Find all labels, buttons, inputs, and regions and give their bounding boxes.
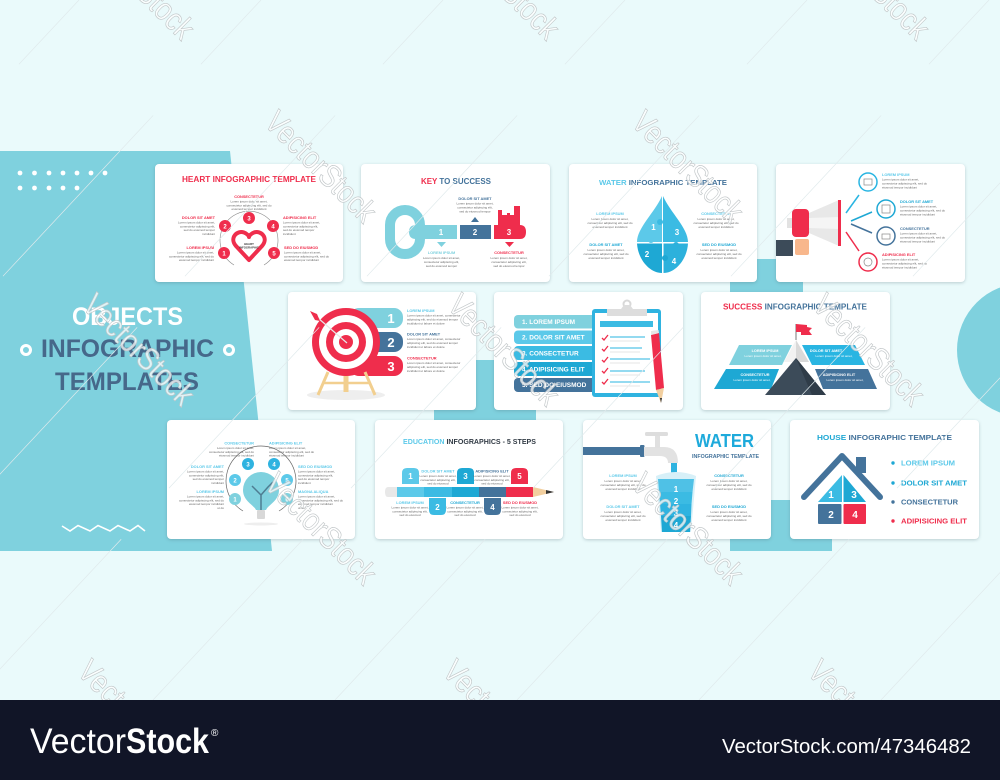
bar text: 1. LOREM IPSUM (522, 319, 575, 326)
labels: consectetur adipiscing elit, (420, 478, 456, 482)
labels (733, 349, 864, 382)
heart caption: INFOGRAPHIC (239, 246, 259, 250)
labels: Lorem ipsum dolor sit amet, (473, 474, 511, 478)
heart caption: HEART (244, 242, 254, 246)
labels: eiusmod tempor incididunt (711, 487, 747, 491)
panel: key to success: 3 (507, 228, 512, 237)
bulb icon (243, 472, 279, 526)
labels: Lorem ipsum dolor sit amet, (882, 258, 919, 262)
labels: MAGNA ALIQUA (298, 489, 329, 494)
numbered circles (229, 458, 293, 505)
labels: sed do eiusmod (454, 513, 476, 517)
labels: eiusmod tempor incididunt (698, 225, 734, 229)
title: HOUSE INFOGRAPHIC TEMPLATE (817, 433, 952, 442)
labels: consectetur adipiscing elit, sed do (900, 236, 945, 240)
labels: Lorem ipsum dolor sit amet, (900, 232, 937, 236)
labels (423, 196, 528, 268)
labels: Lorem ipsum dolor sit amet, consectetur (407, 314, 460, 318)
labels: incididunt (283, 232, 296, 236)
glass numbers: 2 (674, 497, 679, 506)
step tabs (402, 468, 528, 515)
numbers: 5 (272, 252, 276, 258)
bullet list (891, 458, 967, 526)
tab numbers (408, 472, 522, 512)
panel: heart infographic (155, 164, 343, 282)
labels: DOLOR SIT AMET (810, 349, 843, 353)
key icon (390, 206, 526, 254)
numbers: 4 (272, 462, 276, 468)
labels: consectetur adipiscing elit, sed do (284, 254, 329, 258)
numbered circles (218, 212, 280, 259)
labels: consectetur adipiscing elit, sed do (169, 254, 214, 258)
labels: ADIPISICING ELIT (283, 215, 317, 220)
title: WATER (695, 431, 754, 451)
labels: eiusmod tempor incididunt (284, 258, 319, 262)
labels: Lorem ipsum dolor sit amet, (697, 217, 735, 221)
labels: Lorem ipsum dolor sit amet, (269, 446, 306, 450)
labels: DOLOR SIT AMET (182, 215, 216, 220)
clipboard icon (592, 300, 661, 397)
band numbers: 1 (387, 311, 395, 326)
labels: ut do (217, 506, 224, 510)
labels: SED DO EIUSMOD (702, 242, 736, 247)
bullet list: CONSECTETUR (901, 498, 959, 506)
labels: consectetur adipiscing elit, sed do (600, 483, 646, 487)
labels: consectetur adipiscing elit, sed do (706, 483, 752, 487)
watermark text: VectorStock (441, 286, 568, 413)
drop icon (637, 196, 688, 273)
labels: Lorem ipsum dolor sit amet, (217, 446, 254, 450)
numbers: 2 (223, 224, 227, 230)
panel: main heading (18, 171, 233, 531)
labels: Lorem ipsum dolor sit amet, (490, 256, 528, 260)
labels: DOLOR SIT AMET (421, 468, 455, 474)
bar text: 5. SED DO EIUSMOD (522, 382, 587, 389)
list bars (514, 315, 596, 392)
tab numbers: 4 (490, 503, 495, 512)
labels: consectetur adipiscing elit, (447, 509, 483, 513)
panel: key to success: 2 (473, 228, 478, 237)
labels: sed do eiusmod tempor (283, 228, 314, 232)
pencil icon (651, 330, 664, 403)
labels: CONSECTETUR (234, 194, 264, 199)
labels: CONSECTETUR (701, 211, 731, 216)
labels: SED DO EIUSMOD (712, 504, 746, 509)
bar text: 2. DOLOR SIT AMET (522, 334, 585, 342)
tab numbers: 1 (408, 472, 413, 481)
labels: adipiscing elit, sed do eiusmod tempor (407, 318, 458, 322)
labels: CONSECTETUR (900, 226, 930, 231)
labels: sed do eiusmod tempor (426, 264, 457, 268)
house numbers: 4 (852, 510, 858, 521)
labels: LOREM IPSUM (187, 245, 214, 250)
labels: consectetur adipiscing elit, sed do (298, 498, 343, 502)
labels: Lorem ipsum dolor sit amet, (591, 217, 629, 221)
labels: consectetur adipiscing elit, sed do (882, 182, 927, 186)
labels: DOLOR SIT AMET (191, 464, 225, 469)
step bands (350, 308, 403, 376)
heading: objects: OBJECTS (72, 303, 183, 331)
labels: CONSECTETUR (741, 373, 770, 377)
labels: consectetur adipiscing elit, (502, 509, 538, 513)
labels: eiusmod tempor incididunt (179, 258, 214, 262)
labels: consectetur adipiscing elit, (491, 260, 527, 264)
labels: Lorem ipsum dolor sit amet, (744, 354, 782, 358)
labels: consectetur adipiscing elit, sed do (693, 221, 739, 225)
panel: water glass (583, 420, 771, 539)
panel: water drop: 3 (675, 228, 680, 237)
glass numbers: 1 (674, 485, 679, 494)
glass numbers: 3 (674, 509, 679, 518)
tab numbers: 5 (517, 472, 522, 481)
labels: CONSECTETUR (224, 440, 254, 446)
numbers (233, 462, 289, 504)
numbers: 4 (271, 224, 275, 230)
labels: LOREM IPSUM (609, 473, 637, 478)
title: WATER INFOGRAPHIC TEMPLATE (599, 178, 727, 187)
teal decorative shapes (434, 259, 1000, 551)
labels: eiusmod tempor incididunt (882, 186, 917, 190)
footer reference id: VectorStock.com/47346482 (722, 736, 971, 758)
megaphone icon (776, 200, 841, 256)
pointer triangles (437, 217, 514, 247)
footer logo: Vector (30, 722, 126, 761)
labels: eiusmod tempor incididunt (882, 266, 917, 270)
labels: LOREM IPSUM (882, 172, 909, 177)
labels: LOREM IPSUM (596, 211, 624, 216)
numbers (222, 216, 276, 258)
heart icon (233, 232, 265, 260)
labels: Lorem ipsum dolor sit amet, (284, 250, 321, 254)
title: KEY TO SUCCESS (421, 177, 492, 186)
labels: Lorem ipsum dolor sit amet, (604, 479, 642, 483)
labels: sed do eiusmod (481, 482, 503, 486)
panel: water drop (569, 164, 757, 282)
teal left panel (0, 151, 272, 551)
labels: sed do eiusmod (427, 482, 449, 486)
labels: eiusmod tempor incididunt (701, 256, 737, 260)
labels: consectetur adipiscing elit, sed do (882, 262, 927, 266)
labels: consectetur adipiscing elit, sed do (226, 203, 272, 207)
heading: infographic: INFOGRAPHIC (41, 335, 214, 363)
panel: water drop: 2 (645, 250, 650, 259)
labels: consectetur adipiscing elit, sed do (583, 252, 629, 256)
labels: ADIPISICING ELIT (882, 252, 916, 257)
dot grid (18, 171, 107, 190)
glass numbers: 4 (674, 521, 679, 530)
labels: Lorem ipsum dolor sit amet, (882, 178, 919, 182)
panel: education pencil (375, 420, 563, 539)
labels: consectetur adipiscing elit, sed do (587, 221, 633, 225)
labels: eiusmod tempor incididunt (900, 240, 935, 244)
labels: Lorem ipsum dolor sit amet, (604, 510, 642, 514)
tap icon (583, 432, 678, 463)
trapezoids (714, 345, 877, 389)
labels: ut do (298, 506, 305, 510)
house numbers: 2 (828, 510, 834, 521)
labels: sed do eiusmod (509, 513, 531, 517)
labels: DOLOR SIT AMET (606, 504, 640, 509)
labels: consectetur adipiscing elit, (189, 473, 224, 477)
footer bar (0, 700, 1000, 780)
labels: eiusmod tempor incididunt (605, 487, 641, 491)
labels: Lorem ipsum dolor sit amet, (419, 474, 457, 478)
bar text: 3. CONSECTETUR (522, 350, 579, 358)
labels: consectetur adipiscing elit, sed do (696, 252, 742, 256)
bar text: 4. ADIPISICING ELIT (522, 366, 585, 374)
rays (846, 195, 872, 251)
ring ornaments (22, 346, 234, 354)
watermark text: VectorStock (258, 465, 385, 592)
labels: consectetur adipiscing elit, (474, 478, 510, 482)
labels: DOLOR SIT AMET (458, 196, 492, 201)
house numbers: 3 (851, 490, 857, 501)
labels (600, 473, 752, 522)
labels: LOREM IPSUM (752, 349, 778, 353)
labels: incididunt (202, 232, 215, 236)
labels: LOREM IPSUM (396, 500, 424, 505)
labels (169, 194, 329, 262)
labels: adipiscing elit, sed do eiusmod tempor (407, 341, 458, 345)
labels: Lorem ipsum dolor sit amet, (710, 479, 748, 483)
labels: Lorem ipsum dolor sit amet, (815, 354, 853, 358)
labels: Lorem ipsum dolor sit amet, (446, 506, 484, 510)
labels: DOLOR SIT AMET (900, 199, 934, 204)
footer logo bold part: Stock (126, 722, 209, 761)
tab numbers: 2 (435, 503, 440, 512)
labels: Lorem ipsum dolor sit amet, (187, 470, 224, 474)
labels: consectetur adipiscing elit, sed do (179, 498, 224, 502)
labels: eiusmod tempor incididunt (900, 212, 935, 216)
title: EDUCATION INFOGRAPHICS - 5 STEPS (403, 437, 536, 446)
ring icons (859, 173, 895, 271)
labels: eiusmod tempor incididunt (588, 256, 624, 260)
numbers: 1 (222, 252, 226, 258)
numbers: 2 (233, 478, 237, 484)
labels: Lorem ipsum dolor sit amet, (187, 494, 224, 498)
bar text (522, 319, 587, 389)
bullet list: DOLOR SIT AMET (901, 478, 967, 488)
watermark text: VectorStock (258, 103, 385, 230)
labels: consectetur adipiscing elit, (392, 509, 428, 513)
labels: consectetur adipiscing elit, sed do (269, 450, 314, 454)
labels: sed do eiusmod tempor (459, 210, 491, 214)
labels: incididunt ut labore et dolore (407, 369, 445, 373)
labels: incididunt ut labore et dolore (407, 345, 445, 349)
labels: Lorem ipsum dolor sit amet, (700, 248, 738, 252)
labels: consectetur adipiscing elit, (298, 473, 333, 477)
labels: eiusmod tempor incididunt (298, 502, 333, 506)
labels: incididunt (211, 481, 224, 485)
labels: sed do eiusmod tempor (184, 228, 215, 232)
numbers: 1 (233, 498, 237, 504)
glass icon (656, 463, 696, 532)
labels (583, 211, 742, 260)
panel: megaphone (776, 164, 965, 282)
target icon (310, 308, 380, 376)
wave ornament (62, 526, 145, 531)
labels: Lorem ipsum dolor sit amet, (423, 256, 460, 260)
labels: CONSECTETUR (407, 356, 437, 360)
labels: consectetur adipiscing elit, (180, 224, 215, 228)
labels: eiusmod tempor incididunt (231, 207, 267, 211)
panel: light bulb (167, 420, 355, 539)
tab numbers: 3 (463, 472, 468, 481)
labels: SED DO EIUSMOD (503, 500, 537, 505)
labels: LOREM IPSUM (197, 489, 224, 494)
bullet list: LOREM IPSUM (901, 458, 955, 468)
labels (179, 440, 343, 510)
title: SUCCESS INFOGRAPHIC TEMPLATE (723, 302, 868, 312)
labels: sed do eiusmod tempor (298, 477, 329, 481)
house numbers (828, 490, 858, 521)
panel: water drop: 4 (672, 257, 677, 266)
panel: key to success (361, 164, 550, 282)
band numbers (387, 311, 395, 374)
labels: Lorem ipsum dolor sit amet, (733, 378, 771, 382)
labels: Lorem ipsum dolor sit amet, (283, 220, 320, 224)
labels: DOLOR SIT AMET (589, 242, 623, 247)
labels: consectetur adipiscing elit, (283, 224, 318, 228)
labels: sed do eiusmod tempor (493, 264, 525, 268)
labels: Lorem ipsum dolor sit amet, (298, 470, 335, 474)
labels (391, 468, 539, 517)
labels: incididunt ut labore et dolore (407, 322, 445, 326)
panel: clipboard (494, 292, 683, 410)
band numbers: 3 (387, 359, 395, 374)
labels: eiusmod tempor incididunt (592, 225, 628, 229)
labels: consectetur adipiscing elit, sed do (900, 208, 945, 212)
labels: ADIPISICING ELIT (475, 468, 509, 474)
numbers: 3 (246, 462, 250, 468)
watermark text: VectorStock (76, 286, 203, 413)
house numbers: 1 (828, 490, 834, 501)
labels: Lorem ipsum dolor sit amet, (587, 248, 625, 252)
labels: sed do eiusmod tempor (193, 477, 224, 481)
labels: Lorem ipsum dolor sit amet, (710, 510, 748, 514)
arc (220, 211, 278, 265)
labels: Lorem ipsum dolor sit amet, (298, 494, 335, 498)
easel (307, 372, 385, 400)
band numbers: 2 (387, 335, 395, 350)
labels: eiusmod tempor incididunt (219, 454, 254, 458)
numbers: 3 (247, 216, 251, 222)
title: HEART INFOGRAPHIC TEMPLATE (182, 175, 317, 184)
labels: eiusmod tempor incididunt (711, 518, 747, 522)
watermark text: VectorStock (625, 103, 752, 230)
mountain and flag (765, 324, 826, 395)
labels: consectetur adipiscing elit, sed do (600, 514, 646, 518)
numbers: 5 (285, 478, 289, 484)
house icon (804, 456, 880, 524)
labels: consectetur adipiscing elit, sed do (706, 514, 752, 518)
labels (882, 172, 945, 270)
labels: Lorem ipsum dolor sit amet, (178, 220, 215, 224)
labels: Lorem ipsum dolor sit amet, (177, 250, 214, 254)
labels: Lorem ipsum dolor sit amet, consectetur (407, 361, 460, 365)
labels: CONSECTETUR (494, 250, 524, 255)
panel: success mountain (701, 292, 890, 410)
labels: eiusmod tempor incididunt (605, 518, 641, 522)
labels: LOREM IPSUM (407, 308, 434, 313)
panel: house (790, 420, 979, 539)
labels: adipiscing elit, sed do eiusmod tempor (407, 365, 458, 369)
labels: eiusmod tempor incididunt (189, 502, 224, 506)
pencil (385, 487, 554, 497)
heading: templates: TEMPLATES (55, 368, 199, 396)
labels: Lorem ipsum dolor sit amet, (391, 506, 429, 510)
labels: Lorem ipsum dolor sit amet, (501, 506, 539, 510)
labels: sed do eiusmod (399, 513, 421, 517)
labels: Lorem ipsum dolor sit amet, (230, 200, 268, 204)
bullet list: ADIPISICING ELIT (901, 516, 967, 526)
registered mark: ® (211, 728, 219, 739)
drop numbers: 1 (651, 223, 656, 232)
labels: consectetur adipiscing elit, (457, 206, 493, 210)
numbers: 6 (285, 498, 289, 504)
labels: Lorem ipsum dolor sit amet, (456, 202, 494, 206)
watermark text: VectorStock (625, 465, 752, 592)
labels: DOLOR SIT AMET (407, 332, 441, 336)
labels: SED DO EIUSMOD (284, 245, 318, 250)
labels: Lorem ipsum dolor sit amet, (900, 204, 937, 208)
labels: ADIPISICING ELIT (269, 440, 303, 446)
glass numbers (674, 485, 679, 530)
key numbers: 1 (439, 228, 444, 237)
subtitle: INFOGRAPHIC TEMPLATE (692, 454, 759, 460)
labels: Lorem ipsum dolor sit amet, (826, 378, 864, 382)
watermark text: VectorStock (806, 286, 933, 413)
panel: target (288, 292, 476, 410)
labels: Lorem ipsum dolor sit amet, consectetur (407, 337, 460, 341)
labels (407, 308, 460, 373)
labels: consectetur adipiscing elit, (424, 260, 459, 264)
labels: incididunt (298, 481, 311, 485)
labels: CONSECTETUR (714, 473, 744, 478)
arc (226, 446, 296, 511)
labels: eiusmod tempor incididunt (269, 454, 304, 458)
labels: SED DO EIUSMOD (298, 464, 332, 469)
labels: ADIPISICING ELIT (823, 373, 856, 377)
labels: consectetur adipiscing elit, sed do (209, 450, 254, 454)
labels: CONSECTETUR (450, 500, 480, 505)
labels: LOREM IPSUM (428, 250, 455, 255)
